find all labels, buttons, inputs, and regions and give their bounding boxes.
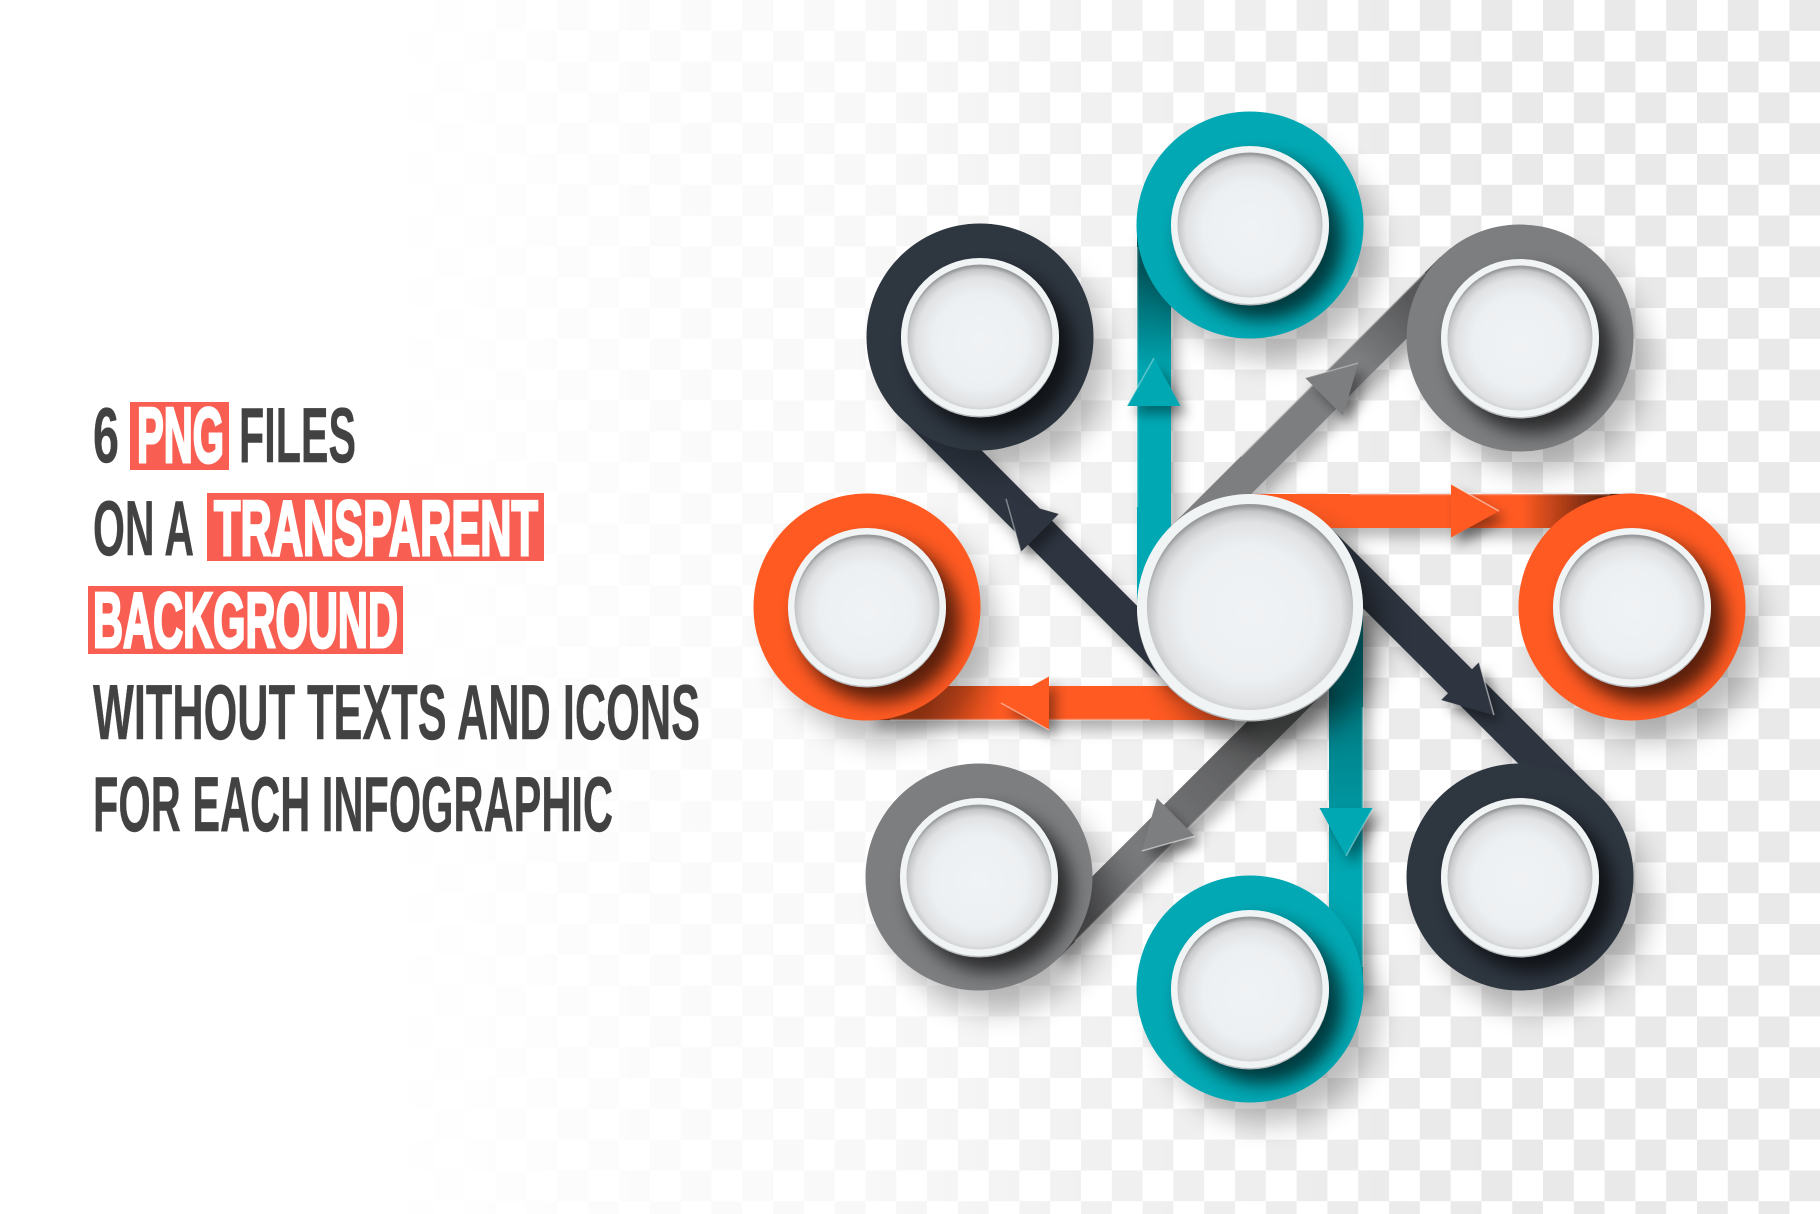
node: dark lower right bbox=[1406, 764, 1648, 1011]
node: grey lower left bbox=[866, 764, 1107, 1011]
arrow: dark upper left bbox=[900, 393, 1194, 687]
line 2: on a transparent: ON A bbox=[93, 484, 194, 572]
arrow: orange right bbox=[1250, 484, 1632, 538]
line 1: 6 PNG files: PNG bbox=[137, 391, 224, 479]
arrow: teal bottom bbox=[1320, 607, 1373, 989]
arrow: grey upper right bbox=[1170, 257, 1464, 551]
line 4: without texts and icons: WITHOUT TEXTS AND ICONS bbox=[93, 668, 700, 756]
central hub circle bbox=[1137, 494, 1382, 745]
line 1: 6 PNG files bbox=[93, 391, 356, 479]
line 3: background: BACKGROUND bbox=[93, 576, 398, 664]
node: grey upper right bbox=[1406, 224, 1648, 472]
line 1: 6 PNG files: 6 bbox=[93, 391, 119, 479]
arrow: dark lower right bbox=[1306, 527, 1600, 821]
arrow: teal top bbox=[1127, 225, 1180, 607]
node: teal bottom bbox=[1136, 876, 1378, 1123]
line 5: for each infographic: FOR EACH INFOGRAPHIC bbox=[93, 760, 613, 848]
node: teal top bbox=[1136, 112, 1378, 359]
node: orange left bbox=[754, 494, 995, 741]
line 2: on a transparent: TRANSPARENT bbox=[214, 484, 538, 572]
line 2: on a transparent bbox=[93, 484, 544, 572]
line 1: 6 PNG files: FILES bbox=[239, 391, 356, 479]
arrow: orange left bbox=[868, 676, 1250, 730]
node: dark upper left bbox=[866, 224, 1108, 471]
diagram: six-way radial infographic bbox=[754, 112, 1760, 1123]
line 3: background bbox=[88, 576, 403, 664]
arrow: grey lower left bbox=[1036, 663, 1330, 957]
text block: description bbox=[88, 391, 700, 848]
node: orange right bbox=[1518, 494, 1760, 741]
